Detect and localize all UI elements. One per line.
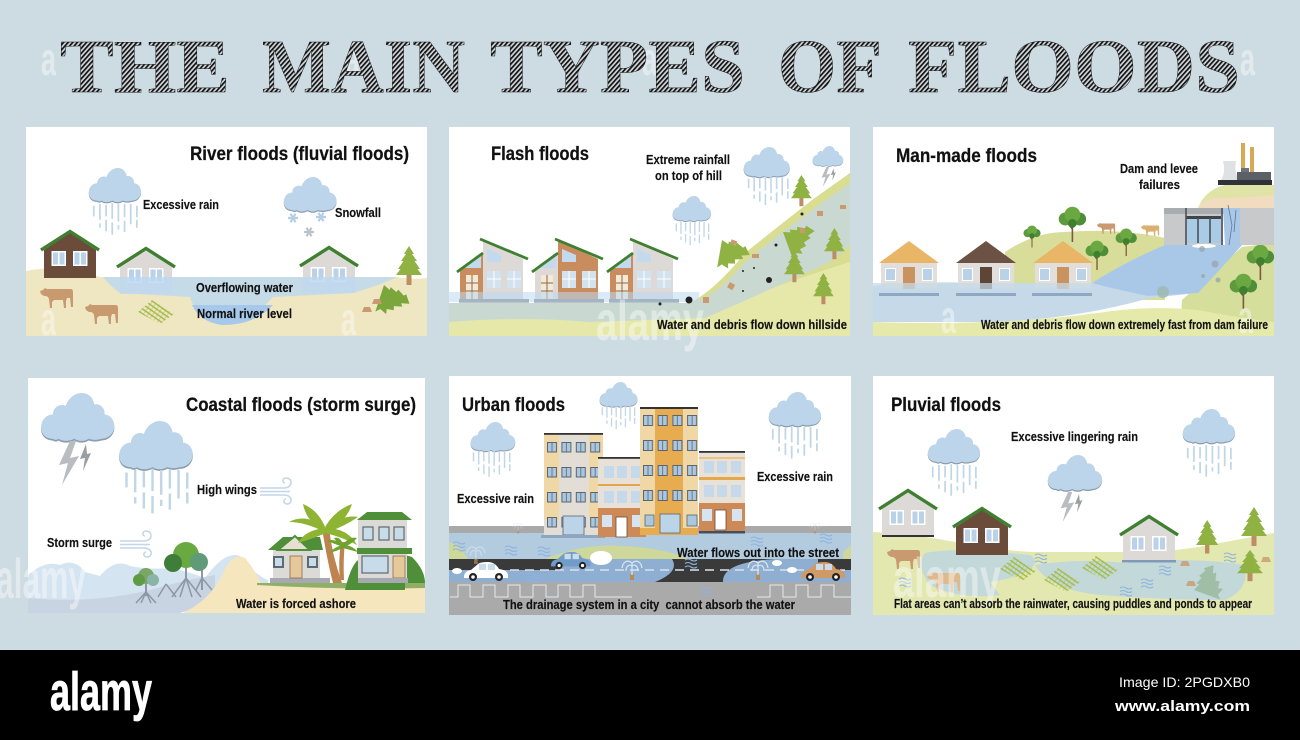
submerged tree (1194, 562, 1231, 600)
debris flow (449, 183, 850, 322)
label: dam and levee failures: failures (1139, 177, 1180, 192)
ground (873, 532, 1274, 615)
flooded pavement (449, 533, 851, 560)
wind: storm surge (120, 531, 151, 557)
road (449, 559, 851, 582)
cars (464, 552, 845, 581)
label: lingering rain: Excessive lingering rain (1011, 429, 1138, 444)
debris (1157, 246, 1220, 298)
grass strip (257, 583, 425, 589)
fountains (467, 523, 821, 580)
panel: urban floods (449, 376, 851, 615)
ponds (921, 550, 1246, 600)
storm cloud (1048, 455, 1102, 522)
image id: Image ID: 2PGDXB0 (1119, 674, 1250, 690)
clouds (471, 382, 821, 477)
panel: flash floods (449, 127, 850, 352)
fallen trees (717, 222, 821, 273)
clouds and rain (673, 146, 843, 245)
rain cloud (89, 168, 141, 235)
watermark glyphs on title: a (1240, 33, 1255, 85)
houses (449, 239, 699, 302)
label: dam and levee failures: Dam and levee (1120, 161, 1198, 176)
label: storm surge: Storm surge (47, 535, 112, 550)
panel: pluvial floods (873, 376, 1274, 615)
watermark: alamy (596, 289, 704, 352)
crops (1000, 556, 1118, 592)
alamy logo: alamy (50, 662, 152, 722)
label: street: Water flows out into the street (677, 545, 840, 560)
normal river level (192, 305, 273, 325)
title: TYPES (490, 25, 745, 109)
fallen tree (375, 285, 413, 321)
label: normal river level: Normal river level (197, 306, 292, 321)
hill (1005, 231, 1165, 300)
watermark glyphs on title (41, 33, 1255, 85)
puddles (449, 559, 851, 582)
label: extreme rainfall: Extreme rainfall (646, 152, 730, 167)
watermark: alamy (893, 546, 1001, 609)
lower pavement (449, 582, 851, 615)
panel: coastal floods (0, 378, 425, 613)
title: MAIN (262, 25, 465, 109)
heading: Urban floods (462, 394, 565, 416)
house: brown (41, 232, 99, 278)
heading: Man-made floods (896, 145, 1037, 167)
trees (784, 175, 845, 304)
panel: river floods (26, 127, 427, 345)
panel: man-made floods (873, 127, 1274, 343)
title: THE (60, 25, 230, 109)
cows (40, 288, 118, 324)
sand hill (183, 557, 425, 613)
heading: Coastal floods (storm surge) (186, 394, 416, 416)
rain cloud (119, 421, 193, 513)
factory (1218, 143, 1272, 185)
watermark: alamy (0, 547, 86, 610)
house: two storey (345, 512, 425, 590)
footer bar (0, 650, 1300, 740)
watermark glyphs on title: a (41, 33, 56, 85)
watermark a left: a (941, 291, 956, 343)
dam (1164, 205, 1274, 248)
title (60, 25, 1240, 109)
houses (879, 490, 1178, 562)
waves (28, 555, 268, 613)
label: overflowing water: Overflowing water (196, 280, 293, 295)
road dash line (510, 569, 845, 571)
hillside (449, 173, 850, 336)
watermark a right: a (341, 293, 356, 345)
watermark a right: a (1238, 291, 1253, 343)
splashes (452, 551, 797, 574)
crops (138, 300, 174, 324)
house: grey right (300, 248, 358, 293)
label: snowfall: Snowfall (335, 205, 381, 220)
foreground ground (873, 308, 1274, 336)
cliff above dam (1198, 185, 1274, 208)
heading: River floods (fluvial floods) (190, 143, 409, 165)
clouds (928, 429, 980, 496)
label: water is forced ashore: Water is forced ashore (236, 596, 356, 611)
label: extreme rainfall: on top of hill (655, 168, 722, 183)
trees (1196, 507, 1267, 581)
debris (703, 205, 846, 303)
mangroves (133, 542, 212, 603)
house: grey left (117, 248, 175, 294)
title: FLOODS (908, 25, 1240, 109)
watermark a left: a (41, 293, 56, 345)
label: drainage: The drainage system in a city cannot absorb the water (503, 597, 795, 612)
building 1 (541, 433, 605, 538)
flood water (873, 245, 1242, 322)
label: excessive rain: Excessive rain (143, 197, 219, 212)
watermark glyphs on title: a (345, 33, 360, 85)
stumps (1180, 557, 1271, 586)
ripples (453, 534, 832, 596)
palm trees (289, 504, 358, 583)
heading: Pluvial floods (891, 394, 1001, 416)
stumps (362, 299, 382, 312)
tree (396, 246, 422, 285)
building 2 (598, 457, 646, 537)
clouds (41, 393, 114, 485)
label: excessive rain right: Excessive rain (757, 469, 833, 484)
watermark glyphs on title: a (642, 33, 657, 85)
cows (887, 549, 960, 592)
label: excessive rain left: Excessive rain (457, 491, 534, 506)
title: OF (778, 25, 882, 109)
drainage pipes (450, 585, 851, 597)
round trees (1023, 207, 1274, 309)
cows (1097, 223, 1159, 236)
website: www.alamy.com (1114, 698, 1250, 715)
label: water and debris: Water and debris flow down hillside (657, 317, 847, 332)
building 4 (699, 451, 745, 534)
right bank (1180, 243, 1274, 336)
houses (873, 241, 1093, 296)
grey ground strip (449, 526, 851, 534)
label: high wings: High wings (197, 482, 257, 497)
house: small (268, 536, 330, 583)
ripples (899, 553, 1236, 596)
overflowing water (103, 277, 397, 325)
label: dam and levee failures (1120, 161, 1198, 192)
label: extreme rainfall (646, 152, 730, 183)
heading: Flash floods (491, 143, 589, 165)
rain cloud (1183, 409, 1235, 477)
snow cloud (284, 177, 337, 236)
building 3 (640, 407, 701, 535)
wind: high (260, 478, 291, 504)
